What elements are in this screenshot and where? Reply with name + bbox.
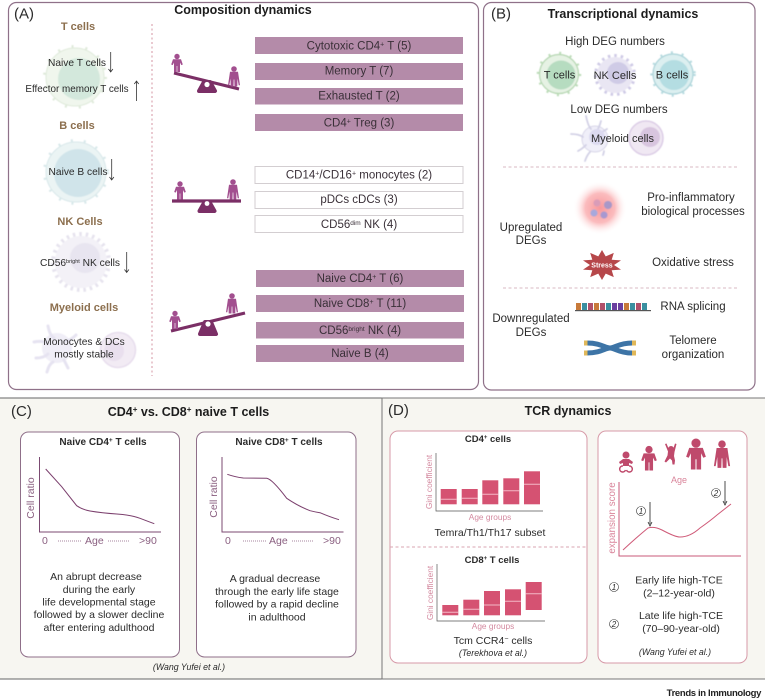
text: CD8 description: through the early life stage [215, 586, 339, 598]
NK cells group: NK Cells [57, 216, 103, 228]
icon: dendritic cell and monocyte [34, 326, 136, 372]
list: cell types increasing: + [347, 118, 351, 126]
list: cell types decreasing: Naive B (4) [331, 348, 389, 360]
card: expansion score by age: Age [671, 475, 687, 485]
text: CD4 description: after entering adulthood [44, 622, 155, 634]
card: Gini coefficient charts [390, 431, 587, 663]
text: high DEG numbers: High DEG numbers [565, 36, 665, 48]
card: expansion score by age: (Wang Yufei et al.) [639, 647, 711, 657]
card: Gini coefficient charts: cells [487, 434, 511, 445]
chart: expansion curve: expansion score [607, 482, 618, 554]
panel: B transcriptional dynamics: DEGs [516, 327, 547, 339]
card: naive CD4: Naive CD4 [59, 437, 109, 448]
panel: C naive T cells [0, 398, 382, 679]
list: cell types stable: CD56 [321, 219, 350, 231]
legend: late life high-TCE: 2 [611, 620, 617, 629]
card: Gini coefficient charts: Tcm CCR4 [454, 635, 504, 647]
NK cells group: bright [66, 259, 80, 265]
list: cell types decreasing: Naive CD8 [314, 298, 369, 310]
legend: early life high-TCE: Early life high-TCE [635, 574, 723, 586]
card: naive CD4 [20, 432, 180, 657]
chart: CD8 curve: Cell ratio [208, 476, 220, 518]
list: cell types stable: CD14 [286, 170, 315, 182]
icon: stress star [583, 250, 621, 280]
list: cell types stable: pDCs cDCs (3) [320, 194, 398, 206]
chart: expansion curve: 2 [713, 489, 719, 498]
list: cell types stable: /CD16 [319, 170, 352, 182]
legend: late life high-TCE: Late life high-TCE [639, 610, 723, 622]
panel label C: (C) [11, 403, 32, 420]
NK cells group: NK cells [80, 258, 120, 269]
list: cell types increasing [255, 37, 463, 131]
B cells group: Naive B cells [49, 167, 107, 178]
list: cell types decreasing: + [369, 299, 374, 306]
myeloid cells group: mostly stable [54, 350, 114, 360]
T cells group: T cells [61, 21, 95, 33]
list: cell types decreasing: T (6) [376, 273, 404, 285]
chart: CD4 Gini [424, 453, 543, 522]
text: CD8 description: A gradual decrease [230, 573, 320, 585]
card: Gini coefficient charts: cells [508, 635, 532, 647]
list: cell types increasing: Cytotoxic CD4 [307, 40, 380, 52]
icon: B cell [44, 140, 108, 204]
icons: T, NK and B cells: T cells [544, 70, 576, 82]
legend: early life high-TCE [610, 574, 723, 600]
card: Gini coefficient charts: (Terekhova et al.) [459, 648, 527, 658]
seesaw: young lighter [171, 54, 240, 91]
chart: CD4 curve: Age [85, 535, 104, 547]
text: pro-inflammatory: Pro-inflammatory [647, 192, 735, 204]
T cells group: Naive T cells [48, 58, 106, 69]
list: cell types increasing: + [380, 42, 384, 48]
heading: + [187, 405, 192, 414]
card: Gini coefficient charts: CD8 [465, 555, 484, 566]
list: cell types decreasing: + [372, 274, 376, 281]
citation: (Wang Yufei et al.) [153, 662, 225, 672]
panel: B transcriptional dynamics [484, 2, 755, 390]
heading: vs. CD8 [137, 405, 187, 419]
list: cell types decreasing: Naive CD4 [317, 273, 372, 285]
chart: CD8 curve: >90 [323, 535, 341, 547]
text: low DEG numbers: Low DEG numbers [570, 104, 668, 116]
legend: late life high-TCE [610, 610, 723, 635]
panel label B: (B) [491, 6, 511, 22]
seesaw: old heavier [169, 293, 245, 334]
heading: naive T cells [191, 405, 269, 419]
list: cell types decreasing: bright [348, 326, 365, 333]
panel: B transcriptional dynamics: biological processes [641, 206, 745, 218]
heading: TCR dynamics [525, 404, 611, 418]
chart: CD4 curve [25, 457, 161, 547]
chart: CD8 Gini: Gini coefficient [425, 565, 435, 620]
list: cell types stable: + [352, 170, 356, 178]
text: CD4 description: life developmental stage [42, 596, 156, 608]
myeloid cells group: Myeloid cells [50, 302, 118, 314]
list: cell types increasing: Exhausted T (2) [318, 90, 400, 102]
text: CD4 description: An abrupt decrease [50, 571, 142, 583]
chart: CD8 curve: 0 [225, 535, 231, 547]
T cells group [25, 21, 139, 108]
list: cell types decreasing: NK (4) [365, 325, 401, 337]
legend: early life high-TCE: (2–12-year-old) [643, 588, 715, 600]
chart: CD4 curve: >90 [139, 535, 157, 547]
footer: journal name: Trends in Immunology [667, 688, 762, 699]
icons: myeloid cells [571, 116, 663, 161]
list: cell types increasing: CD4 [324, 118, 347, 130]
icons: T, NK and B cells: NK Cells [594, 70, 637, 82]
list: cell types stable: NK (4) [361, 219, 397, 231]
text: RNA splicing: RNA splicing [660, 301, 726, 313]
list: cell types stable [255, 166, 463, 232]
chart: CD8 Gini: Age groups [472, 621, 514, 631]
panel: A composition dynamics [8, 2, 478, 390]
myeloid cells group: Monocytes & DCs [43, 337, 125, 348]
list: cell types increasing: Memory T (7) [325, 66, 393, 78]
text: telomere organization: Telomere [669, 335, 717, 347]
card: Gini coefficient charts: − [504, 636, 508, 643]
text: CD8 description: followed by a rapid decline [215, 598, 339, 610]
chart: CD4 Gini: Age groups [469, 512, 511, 522]
text: CD8 description: in adulthood [248, 612, 306, 624]
text: CD4 description: followed by a slower decline [34, 609, 165, 621]
chart: CD4 Gini: Gini coefficient [424, 454, 434, 509]
text: upregulated DEGs: Upregulated [500, 222, 562, 234]
card: naive CD8: + [285, 437, 289, 444]
legend: late life high-TCE: (70–90-year-old) [642, 623, 720, 635]
panel label D: (D) [388, 402, 409, 419]
list: cell types increasing: T (5) [384, 40, 411, 52]
icons: myeloid cells: Myeloid cells [591, 133, 654, 145]
card: naive CD8: T cells [289, 437, 323, 448]
panel label A: (A) [14, 6, 34, 22]
icons: T, NK and B cells [538, 52, 694, 96]
card: Gini coefficient charts: Temra/Th1/Th17 subset [435, 527, 546, 539]
icon: chromosome [584, 343, 636, 353]
card: naive CD4: T cells [113, 437, 147, 448]
panel: B transcriptional dynamics: DEGs [516, 235, 547, 247]
B cells group: B cells [59, 120, 95, 132]
text: CD4 description: during the early [63, 584, 136, 596]
list: cell types decreasing: CD56 [319, 325, 348, 337]
icons: age progression people [619, 439, 730, 472]
list: cell types stable: + [315, 170, 319, 178]
chart: CD8 curve: Age [269, 535, 288, 547]
card: naive CD8: Naive CD8 [235, 437, 285, 448]
card: expansion score by age [598, 431, 747, 663]
chart: CD8 curve [208, 457, 344, 547]
card: naive CD4: + [109, 437, 113, 444]
icon: T cell [44, 46, 106, 108]
list: cell types decreasing [256, 270, 464, 362]
card: Gini coefficient charts: T cells [487, 555, 519, 566]
heading: + [133, 405, 138, 414]
icons: T, NK and B cells: B cells [656, 70, 689, 82]
heading: transcriptional dynamics: Transcriptional dynamics [548, 7, 698, 21]
text: oxidative stress: Oxidative stress [652, 257, 734, 269]
icon: stress star: Stress [591, 262, 613, 270]
card: Gini coefficient charts: CD4 [465, 434, 484, 445]
B cells group [44, 120, 114, 204]
heading: composition dynamics: Composition dynamics [174, 3, 312, 17]
legend: early life high-TCE: 1 [612, 583, 616, 592]
card: Gini coefficient charts: + [484, 435, 488, 441]
icon: NK cell [53, 234, 109, 290]
icon: RNA strand [575, 303, 651, 311]
list: cell types stable: dim [350, 220, 361, 227]
chart: CD8 Gini [425, 564, 545, 631]
NK cells group [40, 216, 129, 290]
NK cells group: CD56 [40, 258, 66, 269]
T cells group: Effector memory T cells [25, 84, 129, 95]
card: Gini coefficient charts: + [484, 556, 488, 562]
panel: B transcriptional dynamics: organization [662, 349, 724, 361]
card: naive CD8 [196, 432, 356, 657]
icon: inflammation [573, 181, 627, 235]
chart: expansion curve: 1 [639, 507, 643, 516]
chart: expansion curve [607, 481, 741, 556]
panel: D TCR dynamics [382, 398, 765, 679]
list: cell types decreasing: T (11) [374, 298, 406, 310]
list: cell types increasing: Treg (3) [351, 118, 394, 130]
chart: CD4 curve: Cell ratio [25, 477, 37, 519]
heading: CD4 [108, 405, 133, 419]
chart: CD4 curve: 0 [42, 535, 48, 547]
list: cell types stable: monocytes (2) [356, 170, 432, 182]
myeloid cells group [34, 302, 136, 372]
text: downregulated DEGs: Downregulated [492, 313, 570, 325]
seesaw: balanced [172, 179, 241, 211]
